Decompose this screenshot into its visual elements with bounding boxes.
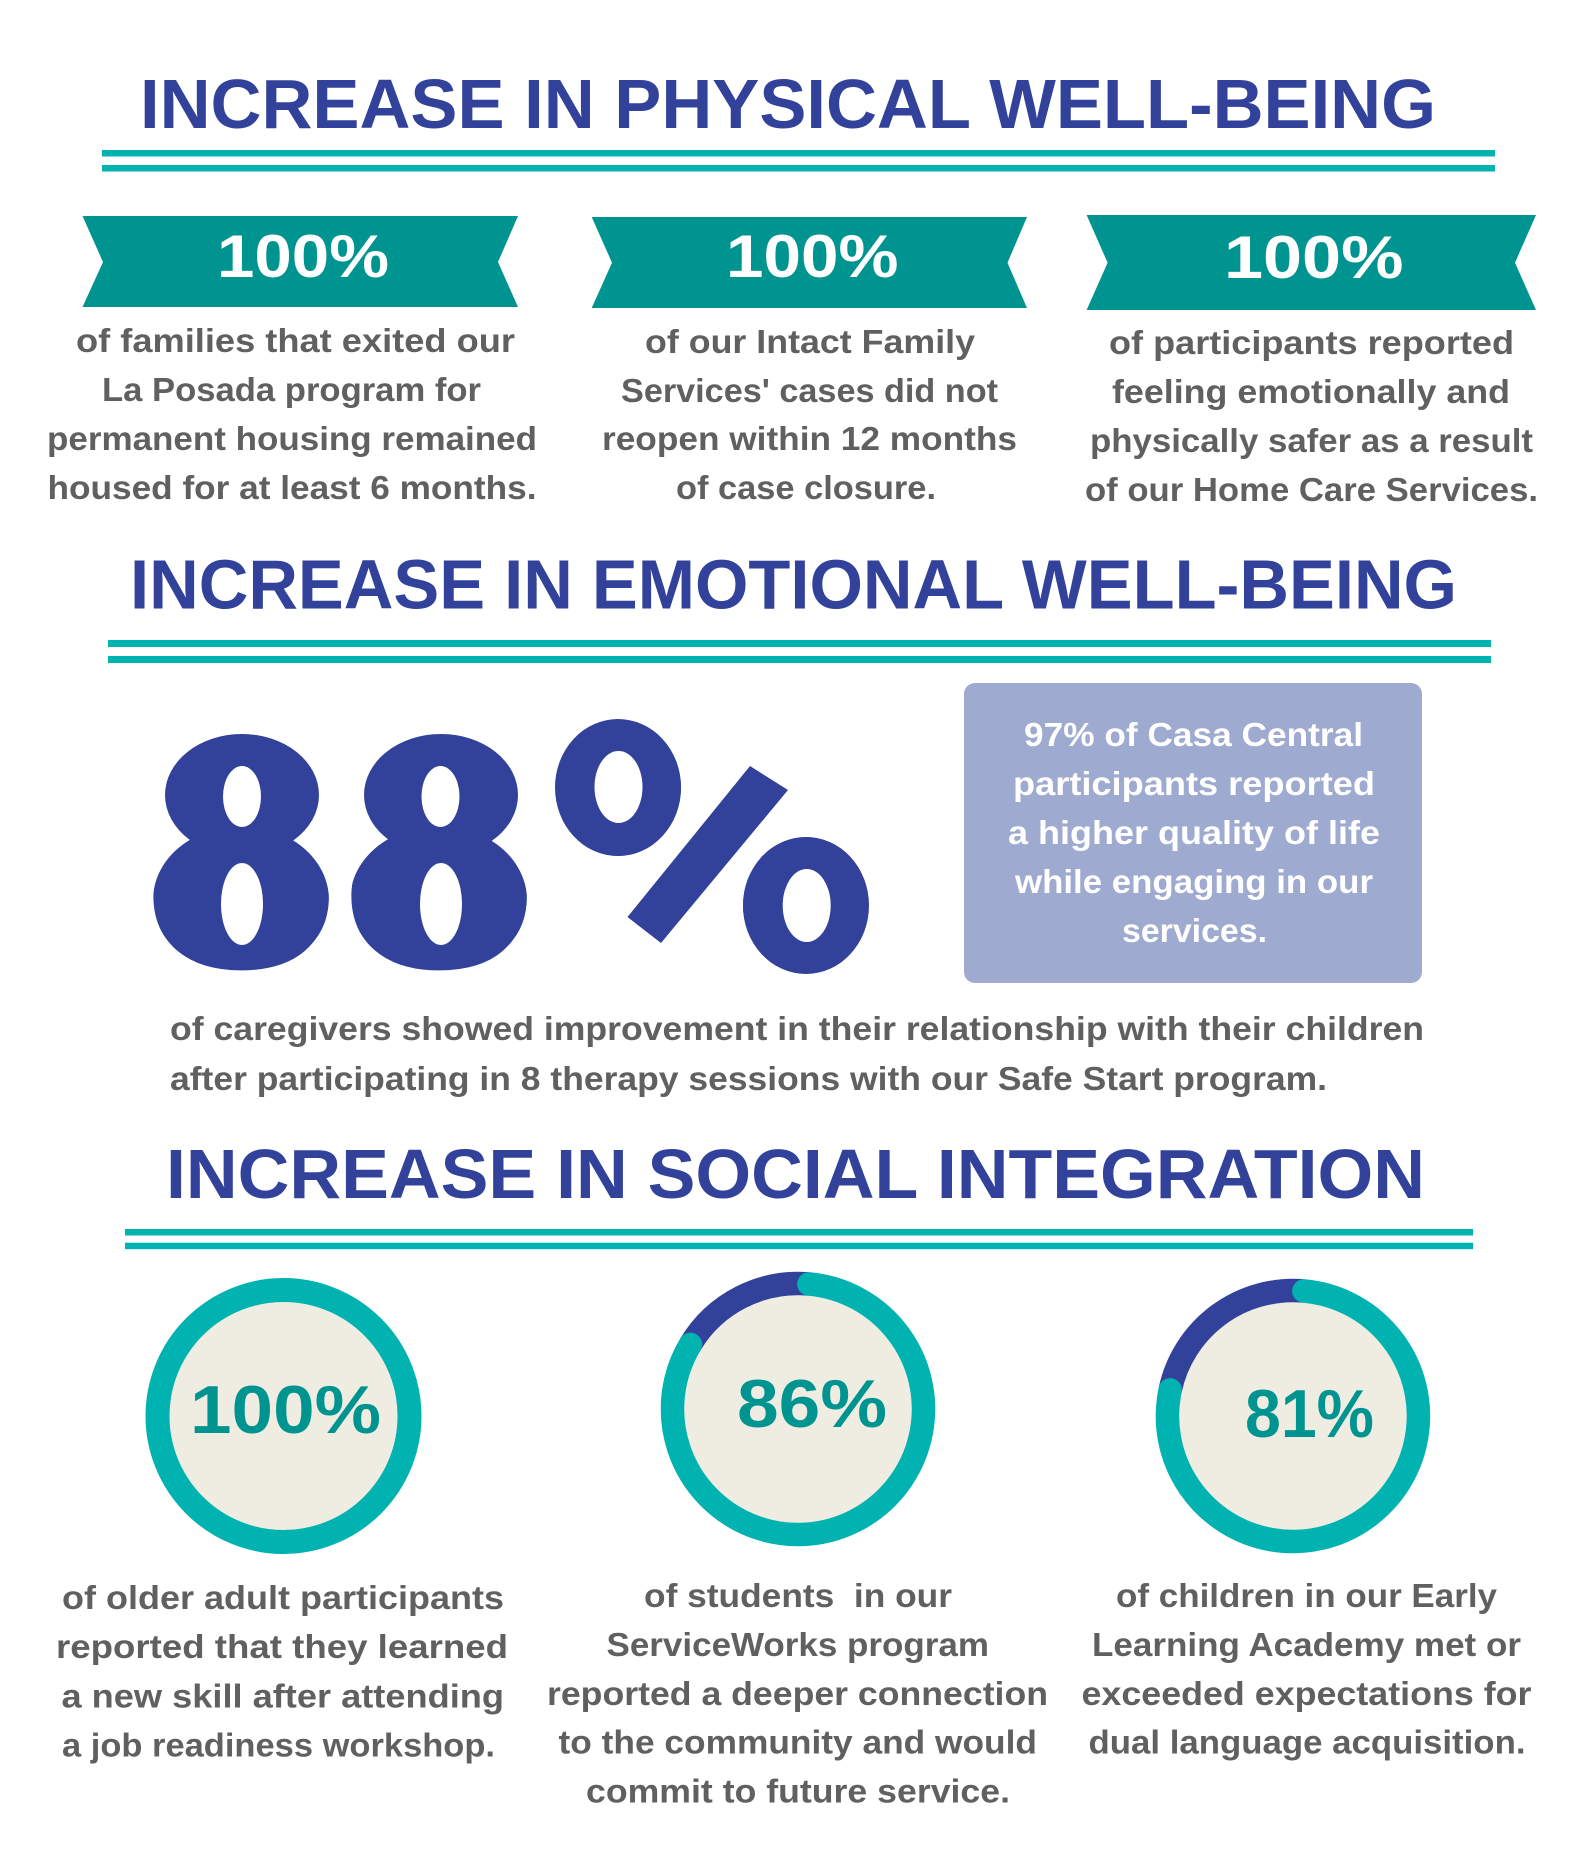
text: intact family services: reopen within 12 months — [602, 420, 1017, 457]
callout: quality of life: 97% of Casa Central — [1024, 716, 1363, 753]
text: families: La Posada program for — [102, 371, 481, 408]
text: intact family services — [602, 323, 1017, 506]
ribbon: 100% — [82, 216, 518, 307]
callout: quality of life: a higher quality of life — [1008, 814, 1380, 851]
ribbon: 100% — [1087, 215, 1536, 310]
text: older adults: a new skill after attending — [62, 1678, 504, 1714]
text: families — [47, 322, 537, 506]
text: serviceworks students: ServiceWorks program — [606, 1626, 989, 1663]
text: home care services: of our Home Care Services. — [1085, 471, 1538, 508]
panel: social stat 1 — [56, 1290, 508, 1764]
text: home care services: physically safer as a result — [1090, 422, 1533, 459]
panel: physical stat 3 — [1085, 215, 1538, 508]
donut: 86%: 86% — [737, 1366, 887, 1442]
big stat: 88%: % — [552, 650, 872, 1041]
ribbon: 100% — [592, 217, 1027, 308]
donut: 81% — [1167, 1291, 1418, 1542]
text: intact family services: Services' cases did not — [621, 372, 998, 409]
donut: 100%: 100% — [190, 1372, 381, 1448]
heading: increase in emotional well-being — [108, 546, 1491, 663]
text: home care services: of participants reported — [1109, 324, 1514, 361]
text: older adults: reported that they learned — [56, 1628, 508, 1665]
heading: increase in social integration — [125, 1135, 1473, 1249]
callout: quality of life: while engaging in our — [1014, 863, 1373, 900]
callout: quality of life: services. — [1122, 912, 1267, 949]
text: early learning academy: of children in our Early — [1116, 1577, 1498, 1614]
text: early learning academy: dual language acquisition. — [1088, 1724, 1526, 1760]
donut: 100% — [158, 1290, 410, 1542]
text: intact family services: of case closure. — [676, 469, 936, 506]
text: families: housed for at least 6 months. — [48, 469, 536, 506]
text: serviceworks students — [547, 1577, 1048, 1810]
text: caregivers — [170, 1010, 1424, 1097]
text: home care services — [1085, 324, 1538, 508]
heading: increase in social integration: INCREASE IN SOCIAL INTEGRATION — [166, 1135, 1425, 1213]
callout: quality of life: participants reported — [1013, 765, 1375, 802]
text: home care services: feeling emotionally and — [1112, 373, 1510, 410]
panel: physical stat 1 — [47, 216, 537, 506]
text: serviceworks students: of students in our — [644, 1577, 952, 1614]
big stat: 88%: 88 — [159, 686, 521, 1016]
ribbon: 100%: 100% — [1224, 224, 1404, 291]
callout: quality of life — [964, 683, 1422, 983]
text: serviceworks students: commit to future service. — [586, 1772, 1010, 1810]
heading: increase in physical well-being — [102, 65, 1495, 172]
heading: increase in emotional well-being: INCREASE IN EMOTIONAL WELL-BEING — [130, 546, 1457, 624]
panel: social stat 2 — [547, 1284, 1048, 1810]
text: caregivers: after participating in 8 therapy sessions with our Safe Start program. — [170, 1060, 1327, 1097]
heading: increase in physical well-being: INCREASE IN PHYSICAL WELL-BEING — [140, 65, 1436, 143]
text: intact family services: of our Intact Family — [645, 323, 976, 360]
ribbon: 100%: 100% — [217, 223, 389, 290]
text: caregivers: of caregivers showed improvement in their relationship with their children — [170, 1010, 1424, 1047]
text: families: permanent housing remained — [47, 420, 537, 457]
big stat: 88% — [153, 719, 869, 974]
text: serviceworks students: reported a deeper connection — [547, 1675, 1048, 1712]
text: early learning academy — [1082, 1577, 1532, 1760]
donut: 86% — [672, 1284, 923, 1535]
text: families: of families that exited our — [76, 322, 515, 359]
text: older adults: a job readiness workshop. — [62, 1726, 495, 1764]
ribbon: 100%: 100% — [726, 223, 898, 290]
text: early learning academy: Learning Academy met or — [1092, 1626, 1521, 1663]
text: serviceworks students: to the community and would — [558, 1724, 1037, 1760]
panel: social stat 3 — [1082, 1291, 1532, 1760]
panel: physical stat 2 — [592, 217, 1027, 506]
text: early learning academy: exceeded expectations for — [1082, 1675, 1532, 1712]
text: older adults: of older adult participants — [62, 1579, 504, 1616]
donut: 81%: 81% — [1245, 1376, 1374, 1452]
text: older adults — [56, 1579, 508, 1764]
